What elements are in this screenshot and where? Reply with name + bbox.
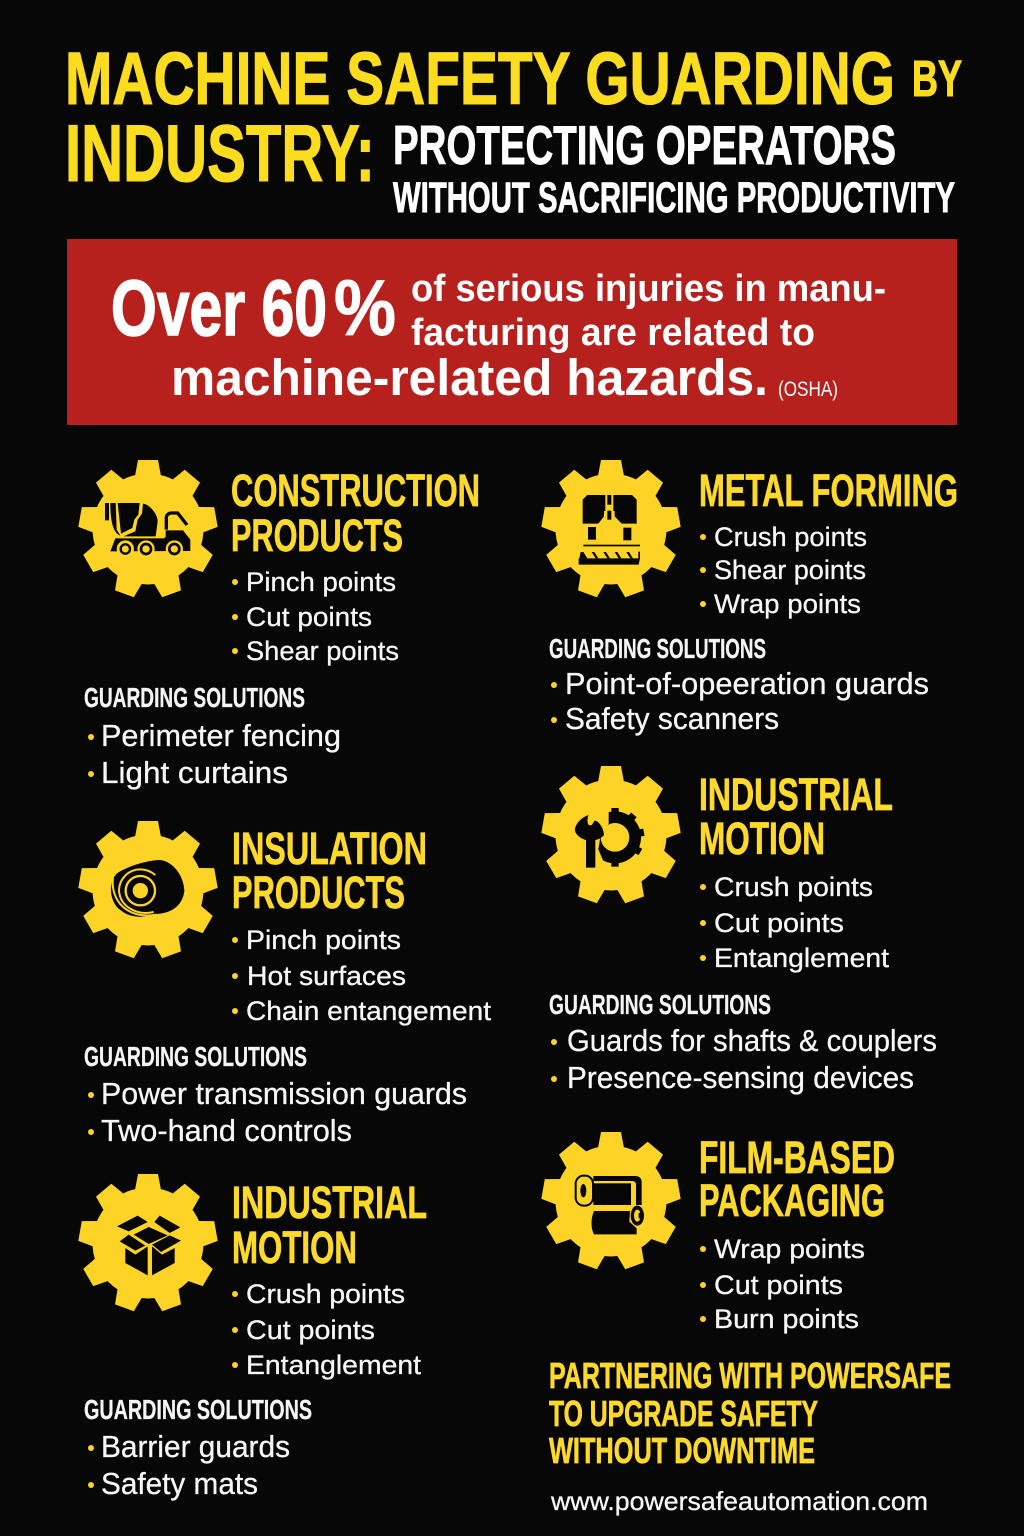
- call to action: partnering with Powersafe: TO UPGRADE SAFETY: [549, 1393, 818, 1434]
- heading: industrial motion: INDUSTRIAL: [699, 769, 893, 820]
- guarding solutions: Safety scanners: [565, 701, 779, 736]
- hazard list: Crush points: [714, 872, 873, 902]
- hazard list: Wrap points: [714, 1234, 865, 1264]
- heading: construction products: [231, 465, 480, 561]
- icon: gear with insulation roll: [78, 821, 218, 959]
- hazard list: [700, 522, 867, 619]
- callout: injury statistic banner: facturing are related to: [411, 312, 815, 354]
- panel: insulation products: [78, 821, 492, 1148]
- hazard list: Cut points: [246, 1315, 375, 1345]
- guarding solutions: Barrier guards: [101, 1429, 290, 1464]
- heading: insulation products: PRODUCTS: [232, 867, 405, 918]
- hazard list: Cut points: [714, 1270, 843, 1300]
- heading: construction products: PRODUCTS: [231, 510, 403, 561]
- heading: film-based packaging: [699, 1132, 895, 1226]
- guarding solutions: GUARDING SOLUTIONS: [549, 633, 766, 664]
- heading: film-based packaging: FILM-BASED: [699, 1132, 895, 1183]
- hazard list: Hot surfaces: [247, 961, 406, 991]
- website url: www.powersafeautomation.com: [550, 1486, 928, 1516]
- heading: film-based packaging: PACKAGING: [699, 1175, 885, 1226]
- guarding solutions: Two-hand controls: [101, 1113, 352, 1148]
- heading: industrial motion: INDUSTRIAL: [232, 1177, 427, 1228]
- guarding solutions: [549, 633, 929, 736]
- guarding solutions: [84, 682, 341, 790]
- guarding solutions: Point-of-opeeration guards: [565, 666, 929, 701]
- guarding solutions: GUARDING SOLUTIONS: [84, 682, 305, 713]
- guarding solutions: GUARDING SOLUTIONS: [84, 1041, 307, 1072]
- guarding solutions: GUARDING SOLUTIONS: [549, 989, 771, 1020]
- heading: insulation products: [232, 823, 427, 918]
- hazard list: Pinch points: [246, 567, 396, 597]
- hazard list: [700, 1234, 865, 1334]
- hazard list: [232, 567, 399, 666]
- callout: injury statistic banner: machine-related hazards.: [171, 349, 768, 406]
- guarding solutions: [84, 1394, 312, 1501]
- hazard list: Entanglement: [246, 1350, 422, 1380]
- title: INDUSTRY:: [65, 109, 375, 199]
- heading: industrial motion: [699, 769, 893, 864]
- call to action: partnering with Powersafe: [549, 1355, 951, 1471]
- hazard list: Wrap points: [714, 589, 861, 619]
- hazard list: [232, 925, 492, 1026]
- guarding solutions: Power transmission guards: [101, 1076, 467, 1111]
- guarding solutions: Guards for shafts & couplers: [567, 1023, 937, 1058]
- panel: industrial motion, left column: [78, 1174, 427, 1501]
- hazard list: Crush points: [714, 522, 867, 552]
- hazard list: Burn points: [714, 1304, 859, 1334]
- callout: injury statistic banner: of serious injuries in manu-: [411, 268, 886, 310]
- panel: industrial motion, right column: [541, 766, 937, 1095]
- hazard list: Shear points: [246, 636, 399, 666]
- icon: gear with film rollers: [541, 1132, 681, 1270]
- heading: insulation products: INSULATION: [232, 823, 427, 874]
- callout: injury statistic banner: (OSHA): [778, 378, 838, 401]
- heading: industrial motion: [232, 1177, 427, 1273]
- hazard list: Pinch points: [246, 925, 401, 955]
- guarding solutions: [549, 989, 937, 1095]
- guarding solutions: [84, 1041, 467, 1148]
- icon: gear with cement mixer truck: [78, 460, 218, 598]
- guarding solutions: Light curtains: [101, 755, 288, 790]
- hazard list: [232, 1279, 422, 1380]
- heading: construction products: CONSTRUCTION: [231, 465, 480, 516]
- panel: film-based packaging: [541, 1132, 895, 1334]
- call to action: partnering with Powersafe: WITHOUT DOWNTIME: [549, 1430, 815, 1471]
- icon: gear with open box: [78, 1174, 218, 1312]
- guarding solutions: GUARDING SOLUTIONS: [84, 1394, 312, 1425]
- heading: industrial motion: MOTION: [699, 813, 825, 864]
- guarding solutions: Presence-sensing devices: [567, 1060, 914, 1095]
- guarding solutions: Safety mats: [101, 1466, 258, 1501]
- panel: metal forming: [541, 460, 958, 736]
- hazard list: Crush points: [246, 1279, 405, 1309]
- hazard list: [700, 872, 890, 973]
- hazard list: Cut points: [246, 602, 372, 632]
- hazard list: Entanglement: [714, 943, 890, 973]
- icon: gear with press machine: [541, 460, 681, 598]
- panel: construction products: [78, 460, 480, 790]
- icon: gear with wrench and cog: [541, 766, 681, 904]
- heading: industrial motion: MOTION: [232, 1222, 357, 1273]
- callout: injury statistic banner: %: [334, 263, 396, 352]
- title: BY: [912, 50, 962, 107]
- callout: injury statistic banner: [67, 239, 957, 425]
- hazard list: Shear points: [714, 555, 866, 585]
- hazard list: Chain entangement: [246, 996, 492, 1026]
- callout: injury statistic banner: Over 60: [111, 263, 327, 352]
- title: [65, 37, 962, 222]
- hazard list: Cut points: [714, 908, 844, 938]
- guarding solutions: Perimeter fencing: [101, 718, 341, 753]
